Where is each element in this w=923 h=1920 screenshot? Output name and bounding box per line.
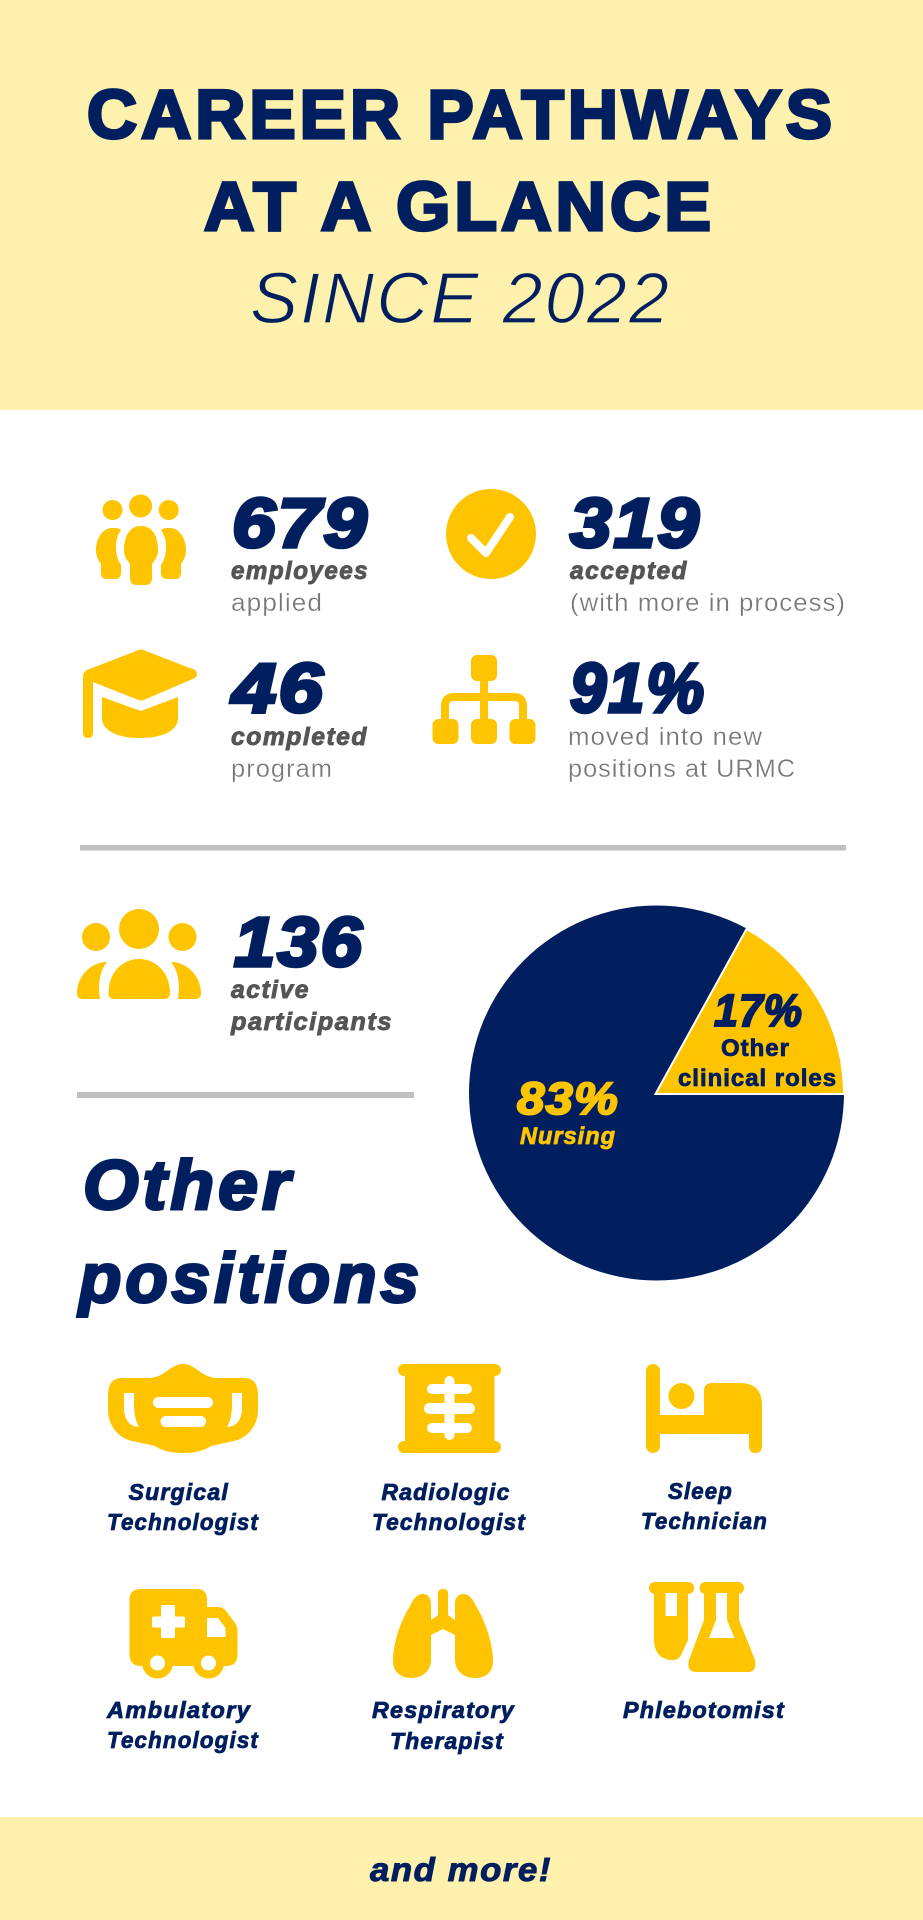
icon: test tube and flask xyxy=(649,1582,755,1672)
position: ambulatory technologist xyxy=(106,1589,259,1753)
number: 46: 46 xyxy=(230,649,325,727)
heading: other positions: Other xyxy=(83,1146,294,1224)
slice label: 83% nursing: Nursing xyxy=(520,1123,616,1150)
position: respiratory therapist xyxy=(372,1589,515,1754)
panel: header banner xyxy=(0,0,923,410)
position: sleep technician xyxy=(641,1364,768,1534)
icon: three people xyxy=(77,909,201,999)
label: completed program: completed xyxy=(231,723,368,751)
number: 91%: 91% xyxy=(570,649,706,727)
position: surgical technologist xyxy=(107,1364,259,1535)
stat: employees applied xyxy=(96,484,369,617)
label: accepted with more in process: (with more in process) xyxy=(570,589,846,617)
icon: org chart xyxy=(432,655,536,744)
icon: lungs xyxy=(393,1589,493,1678)
label: Therapist xyxy=(390,1728,504,1754)
label xyxy=(106,1697,259,1753)
footer text: and more! xyxy=(370,1851,552,1888)
number: 319: 319 xyxy=(570,484,701,562)
position: radiologic technologist xyxy=(372,1364,526,1535)
label: moved into new positions at URMC xyxy=(568,723,796,783)
icon: check circle xyxy=(446,489,536,579)
icon: bed xyxy=(646,1364,762,1453)
title xyxy=(87,76,836,245)
label: Radiologic xyxy=(382,1479,510,1505)
panel: footer banner xyxy=(0,1817,923,1920)
label: employees applied: applied xyxy=(231,589,323,617)
stat: completed program xyxy=(83,649,368,783)
label: Technologist xyxy=(107,1727,259,1753)
pie slice: other clinical roles xyxy=(656,929,844,1094)
label: Ambulatory xyxy=(106,1697,251,1723)
title: CAREER PATHWAYS xyxy=(87,76,836,153)
title: AT A GLANCE xyxy=(204,168,715,245)
slice label: 17% other clinical roles: clinical roles xyxy=(678,1065,837,1092)
label: moved into new positions at URMC: positions at URMC xyxy=(568,755,796,783)
slice label: 17% other clinical roles: Other xyxy=(721,1035,790,1062)
pie chart: nursing vs other clinical roles xyxy=(469,906,844,1280)
stat: moved into new positions xyxy=(432,649,796,783)
subtitle: SINCE 2022 xyxy=(250,259,671,339)
slice label: 17% other clinical roles xyxy=(678,985,837,1092)
label: Technician xyxy=(641,1508,768,1534)
slice label: 83% nursing: 83% xyxy=(517,1073,619,1124)
label: Technologist xyxy=(107,1509,259,1535)
label xyxy=(107,1479,259,1535)
label: completed program: program xyxy=(231,755,333,783)
label: accepted with more in process xyxy=(570,557,846,617)
icon: x-ray xyxy=(398,1364,501,1453)
label xyxy=(372,1697,515,1754)
label: employees applied: employees xyxy=(231,557,369,585)
number: 136: 136 xyxy=(234,903,364,981)
label: Technologist xyxy=(372,1509,526,1535)
label: active participants: participants xyxy=(230,1008,393,1036)
label: accepted with more in process: accepted xyxy=(570,557,688,585)
label xyxy=(372,1479,526,1535)
number: 679: 679 xyxy=(232,484,369,562)
label: active participants: active xyxy=(231,976,310,1004)
label: active participants xyxy=(230,976,393,1036)
label: completed program xyxy=(231,723,368,783)
label: Sleep xyxy=(668,1478,733,1504)
label: employees applied xyxy=(231,557,369,617)
label: Phlebotomist xyxy=(623,1697,785,1723)
stat: accepted xyxy=(446,484,846,617)
label: Respiratory xyxy=(372,1697,515,1723)
label: Surgical xyxy=(128,1479,229,1505)
heading: other positions xyxy=(77,1146,423,1317)
icon: surgical mask xyxy=(108,1364,258,1453)
icon: graduation cap xyxy=(83,650,197,738)
label xyxy=(641,1478,768,1534)
heading: other positions: positions xyxy=(77,1239,423,1317)
stat: active participants xyxy=(77,903,393,1036)
icon: ambulance xyxy=(130,1589,238,1678)
label: moved into new positions at URMC: moved into new xyxy=(568,723,763,751)
slice label: 17% other clinical roles: 17% xyxy=(714,985,803,1036)
position: phlebotomist xyxy=(623,1582,785,1723)
slice label: 83% nursing xyxy=(517,1073,619,1150)
icon: group of employees xyxy=(96,494,186,585)
